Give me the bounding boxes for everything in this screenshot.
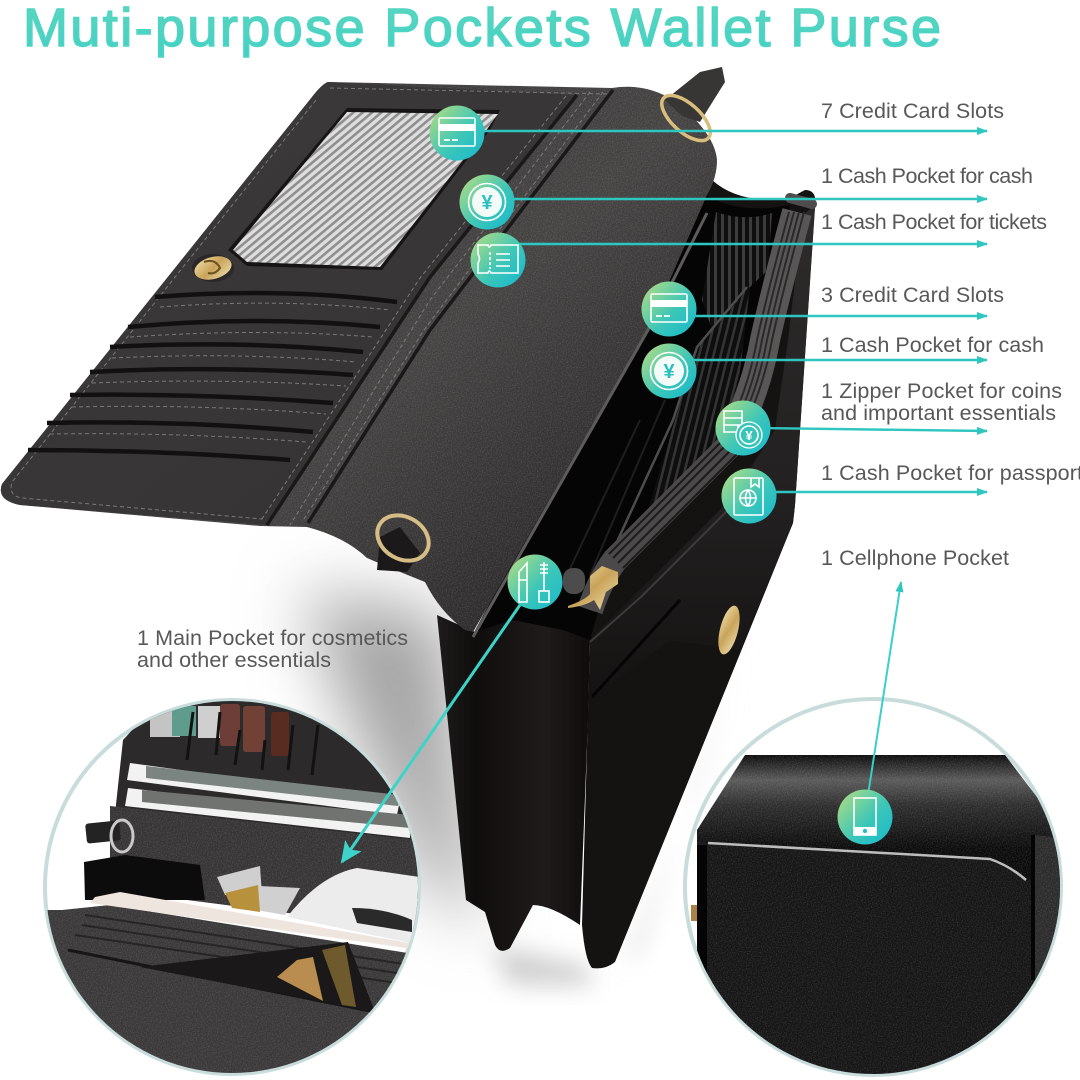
gold medallion <box>277 957 323 1001</box>
front wall <box>590 205 815 700</box>
callout leaders <box>342 131 987 862</box>
detail circle: main pocket <box>40 700 420 1080</box>
banknote inside <box>258 886 300 915</box>
leader 7 credit card slots <box>470 130 987 132</box>
leader 3 credit card slots <box>680 315 987 317</box>
label: cash pocket for tickets: 1 Cash Pocket for tickets <box>821 210 1047 234</box>
banknote 2 <box>125 788 410 838</box>
lipstick <box>217 866 262 912</box>
label: 3 credit card slots: 3 Credit Card Slots <box>821 283 1004 307</box>
banknote 1 <box>127 763 400 815</box>
pocket top line <box>68 948 372 1012</box>
front pocket <box>40 905 420 1080</box>
icon: yen coin <box>460 174 514 230</box>
leader passport <box>760 491 987 493</box>
right strap <box>1035 835 1060 980</box>
striped lining upper <box>702 212 772 330</box>
front rim highlight <box>590 503 735 642</box>
mirror <box>287 868 420 945</box>
wallet side gusset <box>437 615 590 951</box>
black bow <box>84 855 205 900</box>
coloured cards <box>150 704 289 756</box>
icon: cellphone <box>838 790 892 844</box>
zipper band stripes <box>75 915 410 985</box>
panel rim <box>473 213 707 637</box>
compact rim <box>90 892 420 950</box>
label: cash pocket for cash: 1 Cash Pocket for cash <box>821 164 1033 188</box>
icon: yen coin: ¥ <box>663 361 675 383</box>
icon: yen coin: ¥ <box>481 192 493 214</box>
flap card section <box>1 82 577 525</box>
flap stitching <box>11 88 610 519</box>
icon: lipstick and mascara <box>508 554 562 610</box>
top leather <box>697 755 1062 880</box>
zipper pull <box>563 566 618 610</box>
label: cash pocket for cash: 1 Cash Pocket for cash <box>821 333 1044 357</box>
pocket leather <box>680 842 1065 1080</box>
label: cellphone pocket: 1 Cellphone Pocket <box>821 546 1009 570</box>
icon: yen coin <box>642 344 696 398</box>
wallet shadow <box>300 590 740 985</box>
pocket divider lines <box>560 287 747 590</box>
zipper lower strip <box>590 434 743 610</box>
pocket interior <box>475 195 790 640</box>
ID window <box>228 108 500 270</box>
label: cash pocket for passport: 1 Cash Pocket for passport <box>821 461 1080 485</box>
label: zipper pocket: 1 Zipper Pocket for coins <box>821 379 1062 403</box>
wallet body front <box>470 180 816 968</box>
lower strap <box>377 527 420 572</box>
icon: credit card <box>430 106 484 160</box>
top strap <box>665 67 725 122</box>
card stripe <box>322 945 356 1007</box>
leader tickets <box>510 243 987 245</box>
card slots <box>28 293 397 460</box>
diagonal bands <box>260 90 613 525</box>
label: main pocket: and other essentials <box>137 648 331 672</box>
label: zipper pocket: and important essentials <box>821 401 1056 425</box>
dark compact <box>352 908 412 932</box>
zipper upper strip <box>730 198 812 425</box>
icon: credit card <box>642 282 696 336</box>
pocket edge highlight <box>708 843 1026 880</box>
slot dividers <box>187 712 318 775</box>
leader cash pocket lower <box>680 359 987 361</box>
icon: passport <box>722 468 776 524</box>
left seam <box>697 845 707 973</box>
striped lining lower <box>647 287 750 513</box>
icon: coins: ¥ <box>745 428 753 443</box>
front panel crease <box>592 600 680 697</box>
detail circle: cellphone pocket <box>680 699 1065 1080</box>
icon: coins <box>716 400 770 456</box>
leader main pocket arrow <box>342 605 520 862</box>
card slots panel <box>110 700 420 900</box>
label: main pocket: 1 Main Pocket for cosmetics <box>137 626 408 650</box>
side ring and tab <box>85 820 133 852</box>
clasp on flap <box>192 252 234 284</box>
top ring <box>654 88 718 148</box>
front clasp <box>714 604 744 656</box>
black card <box>140 942 375 1012</box>
main panel and flap <box>1 82 717 632</box>
label: 7 credit card slots: 7 Credit Card Slots <box>821 99 1004 123</box>
gold detail <box>691 905 697 921</box>
lower ring <box>369 506 437 570</box>
pocket leather <box>110 806 420 930</box>
leader cash pocket upper <box>500 198 987 200</box>
wallet illustration <box>1 67 816 968</box>
card slot stitching <box>50 303 390 442</box>
icon: ticket <box>470 232 526 288</box>
leader zipper pocket <box>755 428 987 431</box>
leader cellphone arrow <box>868 582 901 795</box>
